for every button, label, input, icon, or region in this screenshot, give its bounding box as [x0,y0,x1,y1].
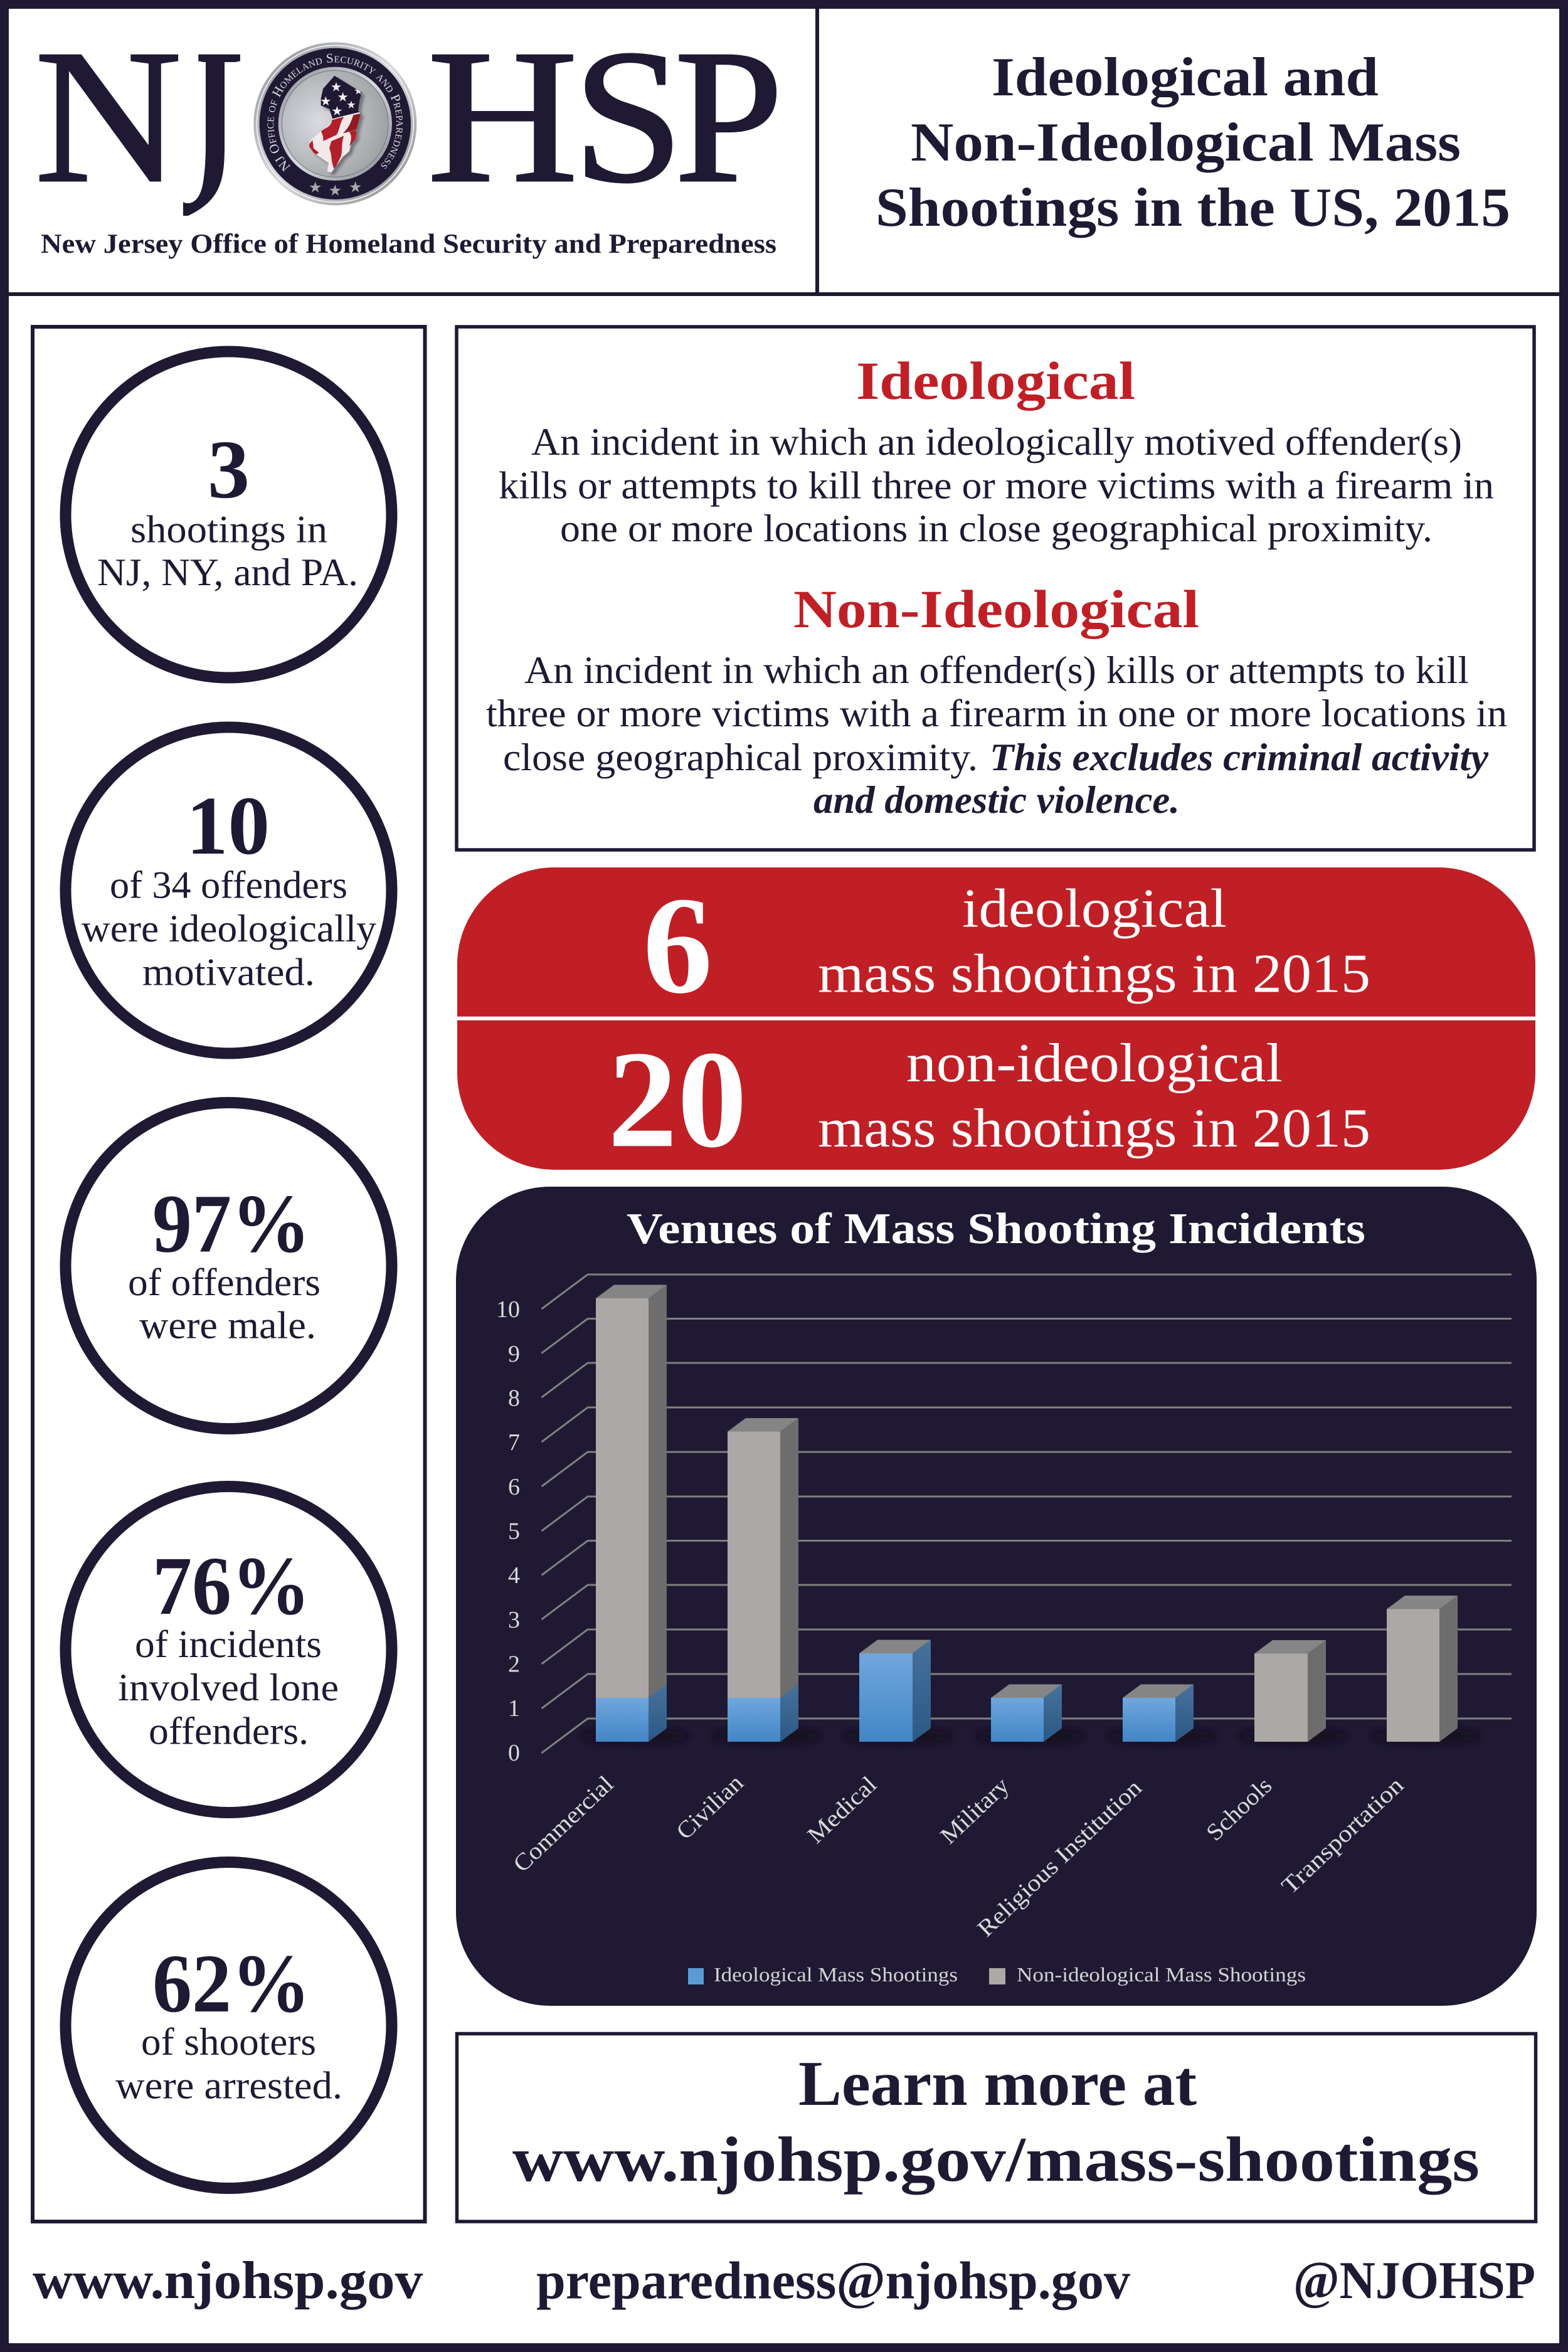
panel: venues chart [456,1187,1537,2006]
chart title: Venues of Mass Shooting Incidents [627,1205,1365,1253]
counter: 20 non-ideological: non-ideological [906,1033,1283,1094]
bar: Schools [1254,1640,1326,1742]
bar: Medical [859,1640,931,1742]
stat: 3 shootings: 3 [208,423,250,516]
stat: 76% lone offenders: 76% [152,1539,310,1632]
y axis labels: 6 [508,1474,520,1500]
email: preparedness@njohsp.gov [536,2252,1130,2311]
stat: 76% lone offenders: involved lone [118,1666,339,1709]
stat: 76% lone offenders [65,1486,391,1813]
legend: Non-ideological Mass Shootings [1017,1963,1306,1986]
x axis labels: Religious Institution [972,1774,1147,1942]
counter: 6 ideological [457,867,1535,1023]
counter: 20 non-ideological: 20 [608,1022,747,1177]
x axis labels: Military [935,1772,1014,1850]
y axis labels: 4 [508,1562,520,1589]
y axis labels: 1 [508,1695,520,1722]
stat: 97% male [65,1103,391,1429]
x axis labels [508,1770,1409,1942]
header rule [9,292,1559,296]
stat: 3 shootings: shootings in [130,508,327,551]
y axis labels [496,1296,520,1766]
footer contacts [33,2251,1535,2311]
title: Ideological and [992,47,1379,108]
non-ideological definition: and domestic violence. [813,779,1180,822]
stat: 10 of 34 offenders: were ideologically [82,908,376,950]
wordmark HSP: P [674,10,783,222]
counter: 6 ideological: ideological [962,878,1227,940]
y axis labels: 8 [508,1385,520,1411]
stat: 10 of 34 offenders: motivated. [142,951,315,993]
stat: 62% arrested [65,1862,391,2188]
non-ideological definition: This excludes criminal activity [990,736,1488,779]
header [9,9,1559,296]
counter: 20 non-ideological: mass shootings in 2015 [818,1098,1370,1159]
panel: learn more: Learn more at [798,2048,1197,2119]
x axis labels: Transportation [1276,1772,1409,1900]
legend: Ideological Mass Shootings [714,1963,958,1986]
bar: Military [991,1685,1062,1742]
ideological definition: one or more locations in close geographical proximity. [560,507,1433,550]
stat: 76% lone offenders: of incidents [135,1623,322,1666]
counter: 6 ideological: mass shootings in 2015 [818,944,1370,1005]
y axis labels: 5 [508,1518,520,1544]
y axis labels: 9 [508,1341,520,1367]
social handle: @NJOHSP [1293,2251,1535,2310]
panel: incident counts [457,867,1535,1177]
wordmark HSP: H [427,10,578,222]
seal ring text: NJ Office of Homeland Security and Preparedness [267,54,403,172]
legend [688,1963,1306,1986]
y axis labels: 10 [496,1296,520,1323]
stat: 3 shootings [65,351,391,677]
panel: learn more: www.njohsp.gov/mass-shootings [512,2124,1480,2195]
counter: 20 non-ideological [457,1020,1535,1177]
title: Non-Ideological Mass [911,112,1461,173]
heading: Ideological: Ideological [856,351,1135,411]
stat: 62% arrested: of shooters [141,2021,316,2063]
y axis labels: 2 [508,1651,520,1677]
stat: 10 of 34 offenders: of 34 offenders [110,864,347,907]
y axis labels: 7 [508,1429,520,1456]
wordmark NJ: J [181,10,243,222]
y axis labels: 3 [508,1607,520,1633]
ideological definition [499,421,1494,550]
gridlines [542,1274,1512,1753]
panel: key statistics [33,327,425,2222]
bar: Commercial [596,1285,667,1742]
icon: NJ Office of Homeland Security seal [253,42,416,206]
ideological definition: kills or attempts to kill three or more victims with a firearm in [499,464,1494,507]
website: www.njohsp.gov [33,2251,423,2310]
heading: Non-Ideological: Non-Ideological [793,579,1199,639]
non-ideological definition [486,649,1507,822]
x axis labels: Schools [1201,1772,1277,1846]
title: Shootings in the US, 2015 [876,177,1510,238]
panel: definitions [457,327,1534,850]
non-ideological definition: close geographical proximity. [503,736,978,779]
wordmark NJ [39,54,240,216]
stat: 10 of 34 offenders: 10 [186,779,270,872]
x axis labels: Civilian [671,1770,748,1845]
x axis labels: Medical [802,1771,882,1849]
stat: 62% arrested: were arrested. [115,2065,342,2107]
stat: 97% male: were male. [139,1305,316,1347]
non-ideological definition: three or more victims with a firearm in one or more locations in [486,692,1507,735]
title [876,47,1510,238]
agency name: New Jersey Office of Homeland Security and Preparedness [41,228,776,259]
y axis labels: 0 [508,1740,520,1766]
non-ideological definition: An incident in which an offender(s) kills or attempts to kill [524,649,1469,692]
header column divider [815,9,819,294]
wordmark HSP [427,10,783,222]
bar shadows [581,1729,1480,1743]
counter: 6 ideological: 6 [643,869,712,1023]
bar: Religious Institution [1123,1685,1194,1742]
x axis labels: Commercial [508,1771,618,1878]
stat: 10 of 34 offenders [65,728,391,1054]
bar: Civilian [728,1418,798,1742]
wordmark NJ: N [34,10,182,222]
stat: 97% male: of offenders [128,1261,320,1304]
panel: learn more [457,2033,1535,2222]
stat: 3 shootings: NJ, NY, and PA. [97,551,358,594]
stat: 97% male: 97% [152,1177,310,1269]
ideological definition: An incident in which an ideologically motived offender(s) [531,421,1462,464]
stat: 62% arrested: 62% [152,1937,310,2030]
stat: 76% lone offenders: offenders. [149,1710,309,1752]
bar: Transportation [1387,1596,1458,1742]
logo: NJOHSP wordmark with seal [34,10,783,259]
wordmark HSP: S [573,10,684,222]
